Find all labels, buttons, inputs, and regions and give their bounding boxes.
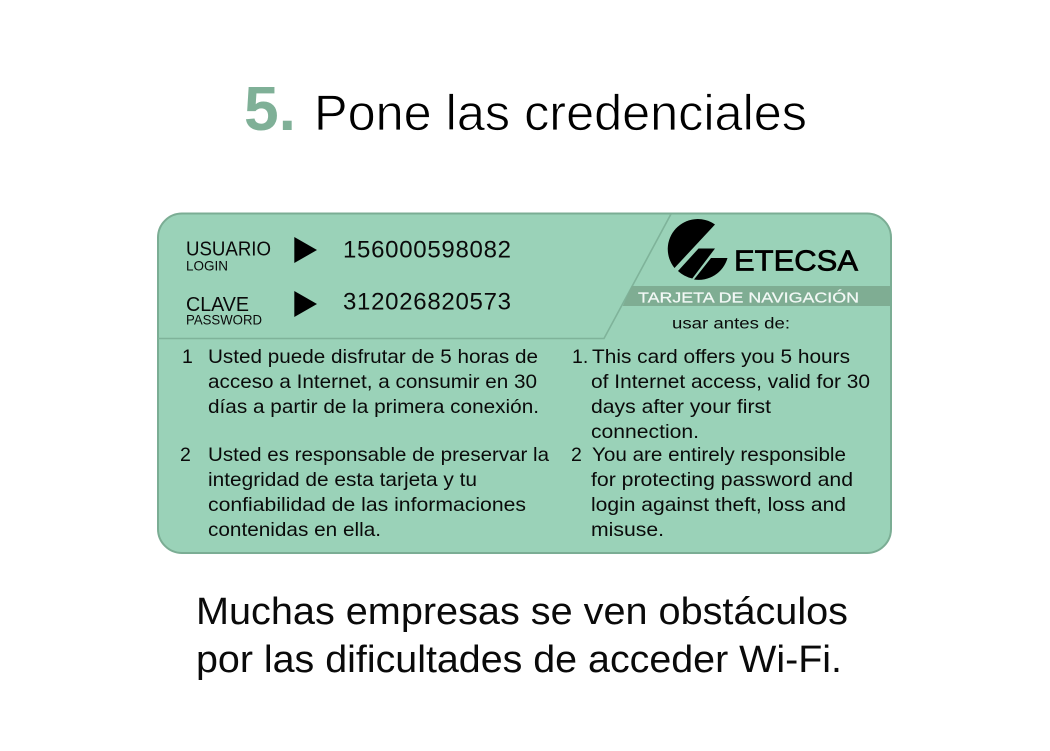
english terms: misuse. <box>591 519 664 541</box>
icon: arrow clave <box>294 291 317 317</box>
english terms: connection. <box>591 421 699 443</box>
step number: 5. <box>244 75 296 144</box>
caption: Muchas empresas se ven obstáculos <box>196 591 848 633</box>
spanish terms: 2 <box>180 444 191 466</box>
spanish terms: Usted puede disfrutar de 5 horas de <box>208 346 538 368</box>
spanish terms: Usted es responsable de preservar la <box>208 444 549 466</box>
usuario number: 156000598082 <box>343 236 511 264</box>
clave label <box>186 294 262 328</box>
band: tarjeta de navigación <box>623 286 890 306</box>
english terms: You are entirely responsible <box>592 444 846 466</box>
usar antes de: usar antes de: <box>672 316 790 332</box>
icon: arrow usuario <box>294 237 317 263</box>
spanish terms <box>180 346 549 541</box>
english terms: login against theft, loss and <box>591 494 846 516</box>
spanish terms: contenidas en ella. <box>208 519 381 541</box>
english terms: of Internet access, valid for 30 <box>591 371 870 393</box>
title <box>244 75 807 144</box>
spanish terms: días a partir de la primera conexión. <box>208 396 539 418</box>
english terms: 2 <box>571 444 582 466</box>
clave label: CLAVE <box>186 294 249 316</box>
usuario label: LOGIN <box>186 258 228 274</box>
english terms <box>571 346 870 541</box>
english terms: days after your first <box>591 396 772 418</box>
caption <box>196 591 848 681</box>
usuario label <box>186 239 271 274</box>
card divider <box>158 214 671 338</box>
card background <box>158 214 891 553</box>
spanish terms: acceso a Internet, a consumir en 30 <box>208 371 537 393</box>
icon: ETECSA logo <box>668 219 728 280</box>
brand name: ETECSA <box>734 246 859 278</box>
english terms: 1. <box>572 346 588 368</box>
caption: por las dificultades de acceder Wi-Fi. <box>196 639 842 681</box>
heading text: Pone las credenciales <box>314 84 807 141</box>
usuario label: USUARIO <box>186 239 271 261</box>
band: tarjeta de navigación: TARJETA DE NAVIGACIÓN <box>638 290 859 306</box>
english terms: This card offers you 5 hours <box>592 346 850 368</box>
panel: ETECSA card <box>158 214 891 553</box>
spanish terms: integridad de esta tarjeta y tu <box>208 469 477 491</box>
clave label: PASSWORD <box>186 312 262 328</box>
clave number: 312026820573 <box>343 288 511 316</box>
spanish terms: 1 <box>182 346 193 368</box>
spanish terms: confiabilidad de las informaciones <box>208 494 526 516</box>
english terms: for protecting password and <box>591 469 853 491</box>
